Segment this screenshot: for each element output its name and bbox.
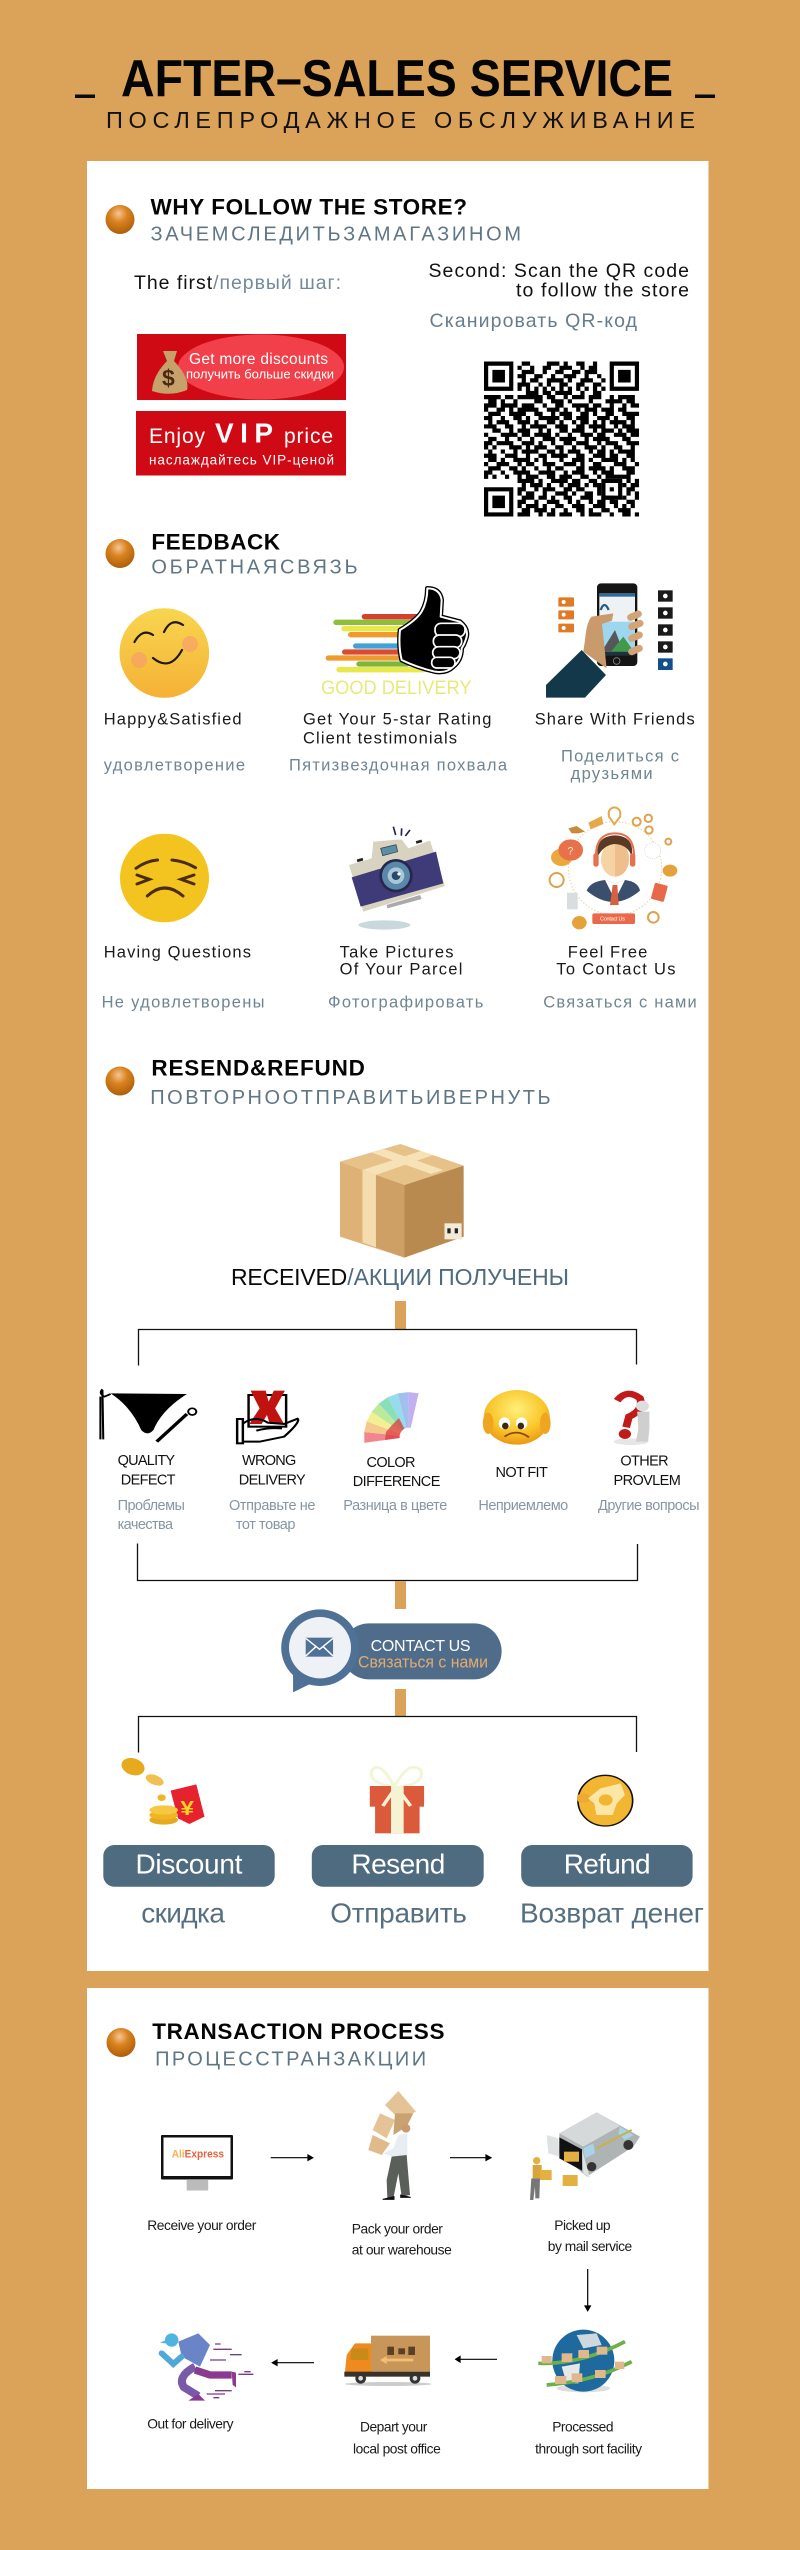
second step line two: to follow the store xyxy=(516,280,689,302)
button: refund: Refund xyxy=(564,1848,651,1879)
banner background xyxy=(137,334,346,400)
panel: upper white card xyxy=(87,161,708,1971)
label: processed sort facility: through sort facility xyxy=(535,2441,642,2456)
heading: FEEDBACK xyxy=(151,529,281,554)
banner background xyxy=(136,411,346,476)
received label: /АКЦИИ ПОЛУЧЕНЫ xyxy=(347,1264,569,1290)
russian heading: ПОВТОРНООТПРАВИТЬИВЕРНУТЬ xyxy=(150,1087,551,1109)
icon: discount coins and red packet xyxy=(117,1754,204,1825)
arrow: down xyxy=(585,2269,590,2311)
icon: question mark figure xyxy=(614,1394,649,1445)
bullet xyxy=(106,1066,134,1096)
button: resend xyxy=(312,1845,484,1887)
button: discount: Discount xyxy=(136,1848,243,1879)
title block xyxy=(75,50,715,133)
heading: RESEND&REFUND xyxy=(151,1056,365,1081)
contact us badge xyxy=(281,1609,502,1692)
label: pack your order: at our warehouse xyxy=(352,2242,452,2257)
banner text english: Get more discounts xyxy=(189,351,328,368)
label: quality defect: DEFECT xyxy=(121,1472,176,1488)
label: depart post office: local post office xyxy=(353,2441,441,2456)
arrow: right one xyxy=(271,2155,313,2160)
first step label: The first/первый шаг: xyxy=(134,272,341,294)
qr code xyxy=(484,364,639,514)
label: other problem russian: Другие вопросы xyxy=(598,1498,700,1514)
label: quality defect russian: качества xyxy=(118,1517,174,1533)
icon: globe with parcels xyxy=(538,2330,632,2392)
enjoy: Enjoy xyxy=(149,425,206,448)
label: receive your order: Receive your order xyxy=(147,2218,257,2233)
icon: customer support agent xyxy=(550,807,677,929)
icon: customer support agent: Contact Us xyxy=(600,916,625,922)
button: discount xyxy=(103,1845,275,1887)
share label: Share With Friends xyxy=(535,710,695,728)
bullet xyxy=(106,539,134,568)
arrow: left two xyxy=(272,2360,314,2365)
label: quality defect xyxy=(118,1453,176,1488)
icon: monitor aliexpress xyxy=(161,2135,233,2190)
icon: discount coins and red packet: ¥ xyxy=(180,1797,195,1819)
icon: delivery van and courier xyxy=(530,2112,640,2200)
icon: cardboard box xyxy=(340,1144,464,1258)
received label: RECEIVED xyxy=(231,1264,347,1290)
icon: monitor aliexpress: AliExpress xyxy=(172,2149,224,2161)
share russian line two: друзьями xyxy=(571,765,653,783)
banner: vip price xyxy=(136,411,346,476)
russian heading: ОБРАТНАЯСВЯЗЬ xyxy=(151,556,358,578)
label: color difference: COLOR xyxy=(366,1455,416,1471)
title dash right xyxy=(695,94,715,98)
section: why follow the store xyxy=(106,194,689,514)
icon: thumbs up good delivery: GOOD DELIVERY xyxy=(321,677,472,699)
label: wrong delivery russian: Отправьте не xyxy=(229,1498,316,1514)
icon: gift box xyxy=(370,1767,424,1833)
label: pack your order xyxy=(352,2221,452,2257)
bracket resolutions xyxy=(138,1716,636,1752)
icon: thumbs up good delivery xyxy=(321,588,472,699)
icon: refund coin xyxy=(577,1775,633,1826)
label: color difference: DIFFERENCE xyxy=(353,1474,441,1490)
rating label line one: Get Your 5-star Rating xyxy=(303,710,491,728)
banner: more discounts xyxy=(137,334,346,400)
label: out for delivery: Out for delivery xyxy=(147,2416,234,2431)
bracket bottom xyxy=(138,1544,638,1580)
pictures label line one: Take Pictures xyxy=(340,943,454,961)
discount russian: скидка xyxy=(141,1897,225,1928)
label: picked up: Picked up xyxy=(554,2218,611,2233)
card background xyxy=(87,1988,708,2489)
label: wrong delivery xyxy=(239,1453,306,1488)
second step line one: Second: Scan the QR code xyxy=(428,260,689,282)
card background xyxy=(87,161,708,1971)
icon: money bag: $ xyxy=(162,365,175,391)
icon: delivery truck xyxy=(344,2336,432,2386)
refund russian: Возврат денег xyxy=(520,1897,704,1928)
label: other problem: PROVLEM xyxy=(614,1473,681,1489)
icon: camera xyxy=(349,827,445,930)
label: depart post office xyxy=(353,2420,441,2456)
second step russian: Сканировать QR-код xyxy=(430,310,638,332)
main title: AFTER–SALES SERVICE xyxy=(121,50,673,108)
happy russian: удовлетворение xyxy=(104,757,245,775)
resend russian: Отправить xyxy=(330,1897,467,1928)
contact russian: Связаться с нами xyxy=(543,994,697,1012)
vip: VIP xyxy=(215,418,273,448)
icon: phone in hand xyxy=(546,583,673,698)
arrow: right two xyxy=(450,2155,491,2160)
connector bar two xyxy=(395,1581,406,1609)
section: resend and refund xyxy=(100,1056,704,1928)
label: wrong delivery: WRONG xyxy=(242,1453,296,1469)
label: not fit russian: Неприемлемо xyxy=(478,1498,568,1514)
icon: wrong delivery hand xyxy=(237,1391,298,1443)
pictures label line two: Of Your Parcel xyxy=(340,960,462,978)
label: depart post office: Depart your xyxy=(360,2420,428,2435)
label: processed sort facility: Processed xyxy=(552,2420,614,2435)
label: wrong delivery russian: тот товар xyxy=(236,1517,296,1533)
russian heading: ПРОЦЕССТРАНЗАКЦИИ xyxy=(155,2049,426,2071)
contact us badge: Связаться с нами xyxy=(358,1652,488,1671)
icon: smiling face xyxy=(120,608,209,698)
heading: WHY FOLLOW THE STORE? xyxy=(150,194,467,220)
subtitle: ПОСЛЕПРОДАЖНОЕ ОБСЛУЖИВАНИЕ xyxy=(106,107,695,133)
price: price xyxy=(284,425,333,448)
label: color difference russian: Разница в цвете xyxy=(343,1498,447,1514)
icon: money bag xyxy=(152,351,187,394)
label: processed sort facility xyxy=(535,2420,642,2456)
label: quality defect russian xyxy=(118,1498,185,1533)
contact label line two: To Contact Us xyxy=(556,960,676,978)
bracket top xyxy=(138,1330,636,1366)
banner highlight xyxy=(178,334,344,400)
rating russian: Пятизвездочная похвала xyxy=(289,757,508,775)
label: wrong delivery russian xyxy=(229,1498,316,1533)
connector bar three xyxy=(395,1689,406,1716)
label: wrong delivery: DELIVERY xyxy=(239,1472,306,1488)
icon: running courier xyxy=(160,2333,253,2401)
bullet xyxy=(106,205,134,234)
bullet xyxy=(106,2028,136,2057)
heading: TRANSACTION PROCESS xyxy=(152,2019,444,2044)
banner text russian: получить больше скидки xyxy=(186,366,334,381)
title dash left xyxy=(75,94,95,98)
russian heading: ЗАЧЕМСЛЕДИТЬЗАМАГАЗИНОМ xyxy=(150,224,521,246)
label: color difference xyxy=(353,1455,441,1490)
share russian line one: Поделиться с xyxy=(561,748,679,766)
icon: color fan xyxy=(364,1392,419,1446)
icon: worker carrying boxes xyxy=(368,2091,416,2199)
russian text: наслаждайтесь VIP-ценой xyxy=(149,452,334,468)
contact us badge: CONTACT US xyxy=(371,1638,471,1655)
button: resend: Resend xyxy=(351,1848,445,1879)
arrow: left one xyxy=(456,2356,497,2362)
label: not fit: NOT FIT xyxy=(496,1465,548,1481)
label: other problem xyxy=(614,1453,681,1489)
contact label line one: Feel Free xyxy=(568,943,647,961)
icon: worried face xyxy=(120,834,209,922)
label: quality defect russian: Проблемы xyxy=(118,1498,185,1514)
connector bar one xyxy=(395,1301,406,1329)
label: picked up xyxy=(548,2218,633,2254)
panel: transaction process xyxy=(87,1988,708,2489)
icon: sad emoji holding head xyxy=(483,1390,551,1445)
label: other problem: OTHER xyxy=(620,1453,669,1469)
questions label: Having Questions xyxy=(104,943,251,961)
section: feedback xyxy=(102,529,697,1012)
button: refund xyxy=(521,1845,693,1887)
pictures russian: Фотографировать xyxy=(328,994,483,1012)
questions russian: Не удовлетворены xyxy=(102,994,264,1012)
happy label: Happy&Satisfied xyxy=(104,710,242,728)
icon: quality defect underwear xyxy=(100,1389,196,1442)
label: picked up: by mail service xyxy=(548,2239,633,2254)
label: pack your order: Pack your order xyxy=(352,2221,443,2236)
icon: customer support agent: ? xyxy=(567,845,573,857)
label: quality defect: QUALITY xyxy=(118,1453,175,1469)
rating label line two: Client testimonials xyxy=(303,729,457,747)
